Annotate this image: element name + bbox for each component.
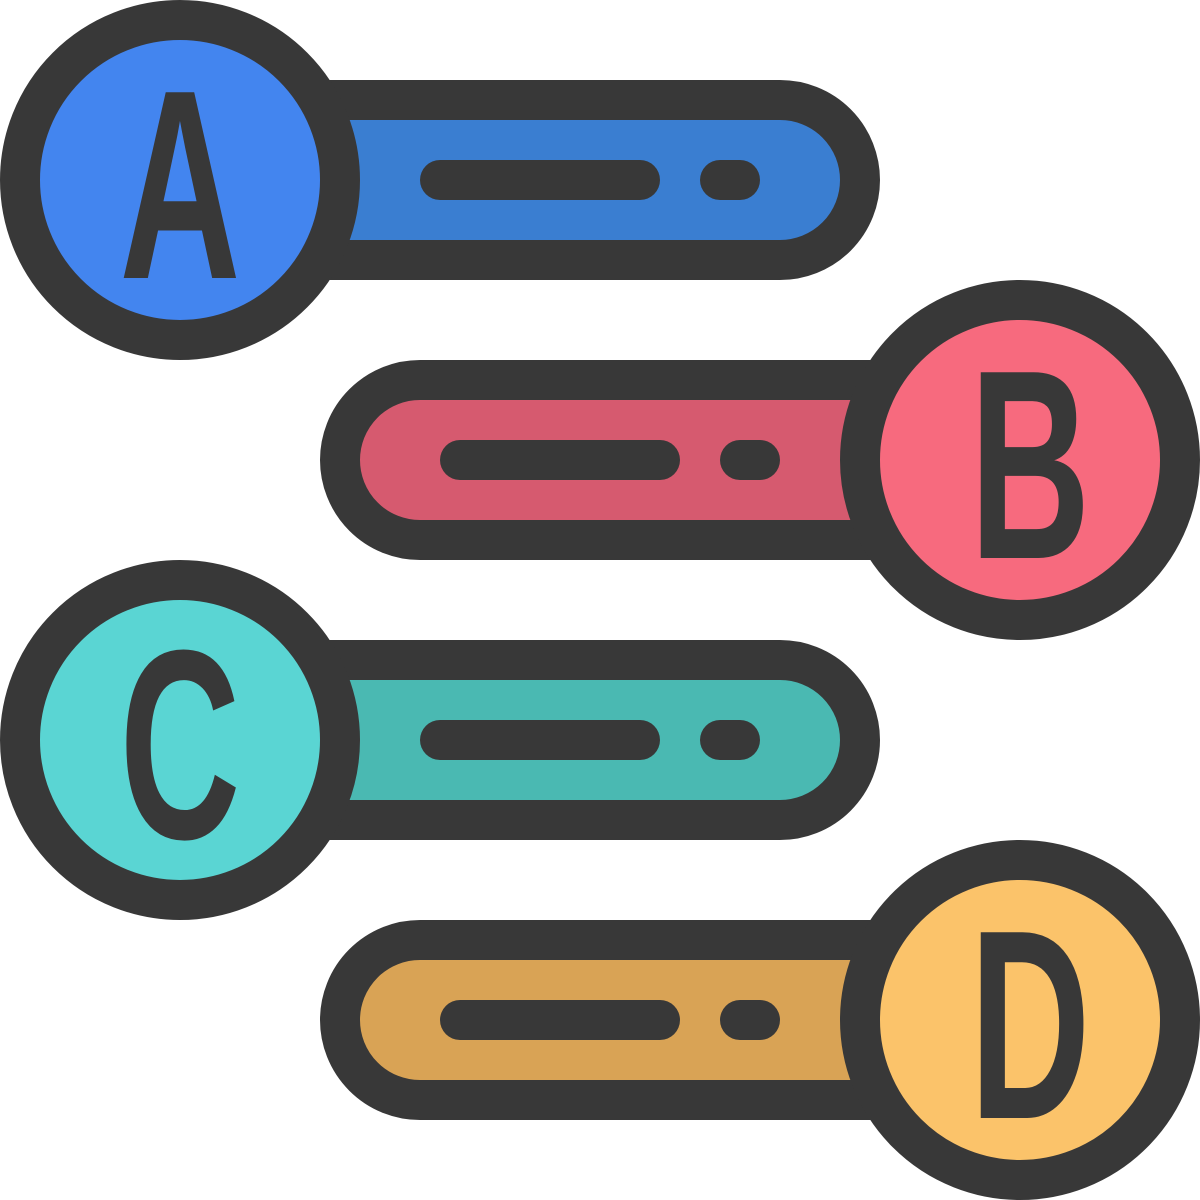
bar D [340, 940, 1020, 1100]
circle C [20, 580, 340, 900]
letter B: B [970, 314, 1090, 616]
row A [20, 20, 860, 340]
row B [340, 300, 1180, 620]
letter C: C [120, 594, 240, 896]
bar B [340, 380, 1020, 540]
lines C [440, 720, 740, 760]
lines B [460, 440, 760, 480]
circle A [20, 20, 340, 340]
lines A [440, 160, 740, 200]
letter A: A [120, 34, 240, 336]
lines D [460, 1000, 760, 1040]
circle B [860, 300, 1180, 620]
circle D [860, 860, 1180, 1180]
bar A [180, 100, 860, 260]
letter D: D [970, 874, 1090, 1176]
row D [340, 860, 1180, 1180]
bar C [180, 660, 860, 820]
row C [20, 580, 860, 900]
